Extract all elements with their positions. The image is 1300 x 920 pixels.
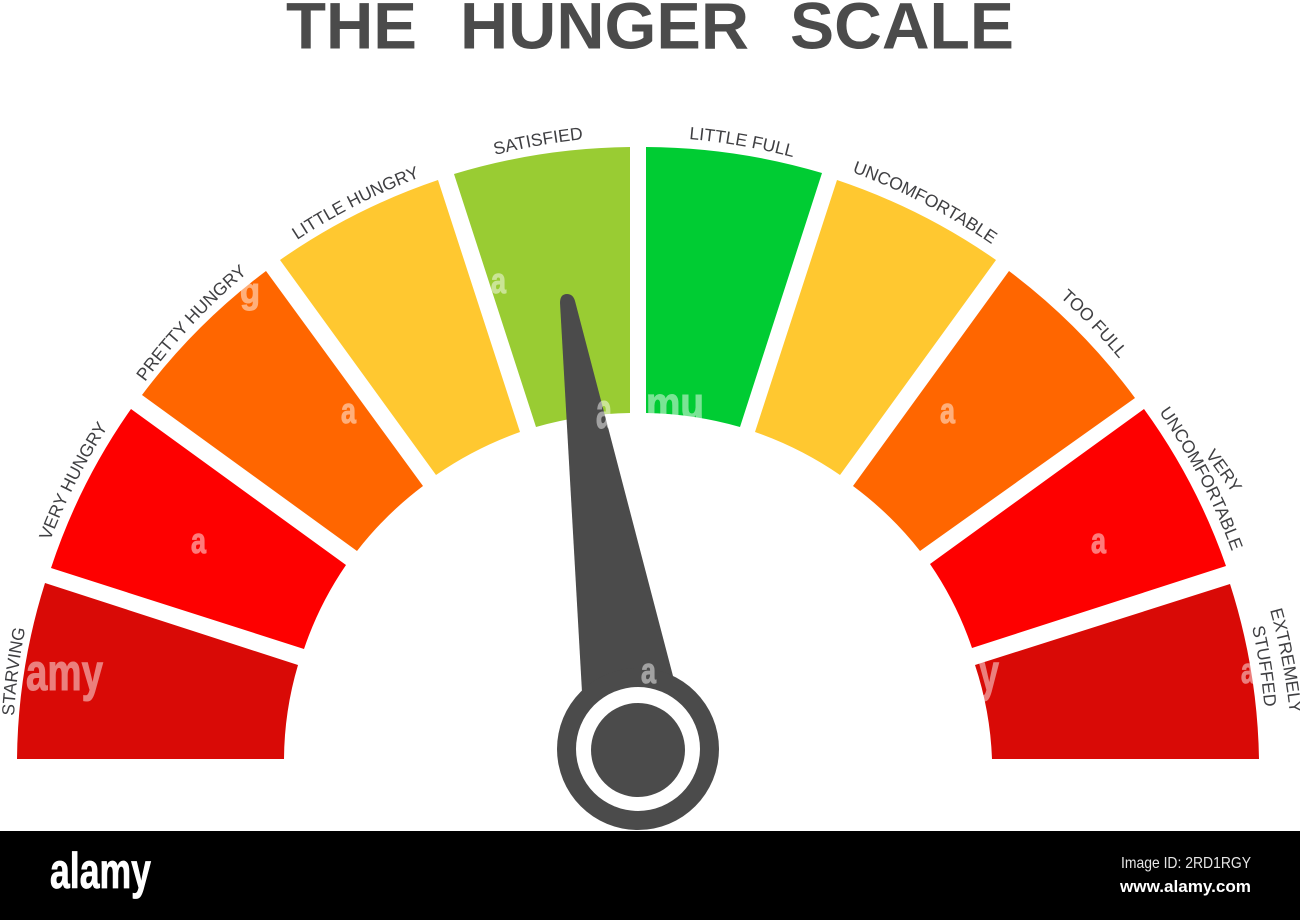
- title: [286, 0, 1014, 62]
- segment: uncomfortable: [755, 180, 996, 475]
- label: extremely stuffed: [1252, 608, 1300, 710]
- watermark marks: a: [341, 390, 357, 431]
- watermark marks: amy: [26, 644, 103, 702]
- segment: little hungry: [280, 180, 520, 475]
- segment: little full: [646, 147, 822, 427]
- watermark marks: a: [641, 650, 657, 691]
- watermark marks: a: [191, 520, 207, 561]
- segment: very hungry: [51, 409, 346, 649]
- image id: Image ID: 2RD1RGY: [1121, 855, 1251, 872]
- segment: satisfied: [454, 147, 630, 427]
- label: extremely stuffed: STUFFED: [1252, 626, 1276, 706]
- segment: starving: [17, 583, 298, 759]
- needle pointer: [560, 294, 673, 700]
- label: pretty hungry: PRETTY HUNGRY: [136, 264, 244, 381]
- watermark marks: a: [491, 260, 507, 301]
- hub white ring: [576, 687, 700, 811]
- label: too full: TOO FULL: [1063, 288, 1124, 358]
- label: very uncomfortable: VERY: [1208, 448, 1242, 490]
- watermark marks: g: [240, 270, 260, 311]
- footer bar: [0, 831, 1300, 920]
- watermark marks: a: [596, 383, 613, 439]
- label: satisfied: SATISFIED: [494, 128, 582, 154]
- watermark marks: a: [1091, 520, 1107, 561]
- footer logo: alamy: [50, 843, 151, 899]
- hub centre: [591, 703, 685, 797]
- gauge segments: [17, 147, 1259, 759]
- scale labels: [2, 127, 1300, 715]
- segment: pretty hungry: [142, 271, 423, 551]
- segment: extremely stuffed: [975, 584, 1259, 759]
- label: uncomfortable: UNCOMFORTABLE: [854, 161, 998, 244]
- watermark marks: [26, 260, 1256, 702]
- label: very hungry: VERY HUNGRY: [38, 420, 106, 536]
- hub outer ring: [557, 668, 719, 830]
- watermark marks: mu: [646, 379, 704, 428]
- watermark marks: a: [940, 390, 956, 431]
- label: little hungry: LITTLE HUNGRY: [292, 166, 416, 240]
- watermark marks: y: [979, 644, 999, 702]
- needle and hub: [557, 294, 719, 830]
- label: little full: LITTLE FULL: [690, 127, 793, 157]
- label: very uncomfortable: UNCOMFORTABLE: [1161, 406, 1243, 551]
- segment: too full: [853, 271, 1135, 551]
- segment: very uncomfortable: [930, 409, 1226, 648]
- website: www.alamy.com: [1119, 877, 1251, 896]
- watermark marks: a: [1241, 650, 1256, 691]
